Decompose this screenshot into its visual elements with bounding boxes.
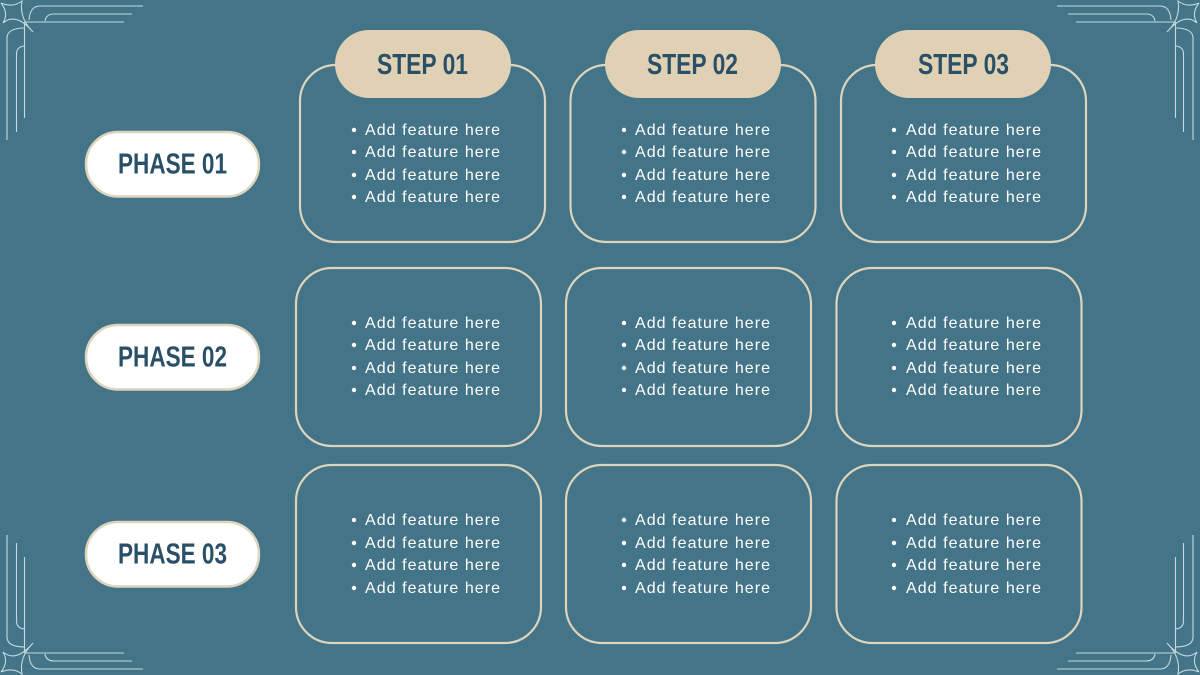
- panel: phase 03 step 02: Add feature here: [635, 557, 770, 574]
- panel: phase 03 step 03: Add feature here: [906, 557, 1041, 574]
- panel: phase 01 step 02: Add feature here: [635, 167, 770, 184]
- panel: phase 03 step 01: Add feature here: [365, 580, 500, 597]
- panel: phase 03 step 02: Add feature here: [635, 512, 770, 529]
- panel: phase 02 step 01: Add feature here: [365, 382, 500, 399]
- panel: phase 03 step 02: [566, 465, 811, 643]
- panel: phase 01 step 01: Add feature here: [365, 167, 500, 184]
- step 01 heading pill: STEP 01: [377, 49, 468, 81]
- step 03 heading pill: STEP 03: [918, 49, 1009, 81]
- panel: phase 01 step 02: Add feature here: [635, 122, 770, 139]
- step 02 heading pill: STEP 02: [647, 49, 738, 81]
- panel: phase 01 step 03: Add feature here: [906, 122, 1041, 139]
- corner ornament: top right: [1057, 1, 1199, 140]
- phase 01 label: [86, 132, 259, 196]
- panel: phase 02 step 03: Add feature here: [906, 360, 1041, 377]
- phase 02 label: [86, 325, 259, 390]
- panel: phase 02 step 02: Add feature here: [635, 337, 770, 354]
- corner ornament: top left: [1, 1, 143, 140]
- panel: phase 02 step 01: [296, 268, 541, 446]
- corner ornament: bottom left: [1, 535, 143, 674]
- panel: phase 01 step 03: Add feature here: [906, 167, 1041, 184]
- panel: phase 01 step 02: [570, 65, 816, 242]
- panel: phase 02 step 03: Add feature here: [906, 315, 1041, 332]
- panel: phase 02 step 02: Add feature here: [635, 315, 770, 332]
- panel: phase 03 step 02: Add feature here: [635, 580, 770, 597]
- step 02 heading pill: [605, 30, 781, 98]
- panel: phase 02 step 01: Add feature here: [365, 315, 500, 332]
- panel: phase 01 step 01: Add feature here: [365, 122, 500, 139]
- corner ornament: bottom right: [1057, 535, 1199, 674]
- panel: phase 02 step 03: [836, 268, 1082, 446]
- step 01 heading pill: [335, 30, 511, 98]
- panel: phase 02 step 03: Add feature here: [906, 382, 1041, 399]
- panel: phase 02 step 02: Add feature here: [635, 382, 770, 399]
- panel: phase 03 step 01: [296, 465, 541, 643]
- panel: phase 02 step 02: [566, 268, 811, 446]
- panel: phase 02 step 01: Add feature here: [365, 360, 500, 377]
- step 03 heading pill: [875, 30, 1051, 98]
- phase 01 label: PHASE 01: [118, 148, 227, 180]
- panel: phase 03 step 03: [836, 465, 1082, 643]
- phase 03 label: [86, 522, 259, 586]
- panel: phase 03 step 01: Add feature here: [365, 535, 500, 552]
- panel: phase 01 step 03: [841, 65, 1086, 242]
- panel: phase 03 step 01: Add feature here: [365, 512, 500, 529]
- panel: phase 01 step 03: Add feature here: [906, 144, 1041, 161]
- panel: phase 03 step 03: Add feature here: [906, 535, 1041, 552]
- panel: phase 01 step 02: Add feature here: [635, 144, 770, 161]
- panel: phase 01 step 03: Add feature here: [906, 189, 1041, 206]
- panel: phase 02 step 03: Add feature here: [906, 337, 1041, 354]
- panel: phase 03 step 01: Add feature here: [365, 557, 500, 574]
- panel: phase 01 step 01: [300, 65, 545, 242]
- phase 03 label: PHASE 03: [118, 538, 227, 570]
- panel: phase 02 step 01: Add feature here: [365, 337, 500, 354]
- panel: phase 02 step 02: Add feature here: [635, 360, 770, 377]
- panel: phase 01 step 01: Add feature here: [365, 144, 500, 161]
- phase 02 label: PHASE 02: [118, 342, 227, 374]
- panel: phase 01 step 01: Add feature here: [365, 189, 500, 206]
- panel: phase 03 step 02: Add feature here: [635, 535, 770, 552]
- panel: phase 01 step 02: Add feature here: [635, 189, 770, 206]
- panel: phase 03 step 03: Add feature here: [906, 580, 1041, 597]
- panel: phase 03 step 03: Add feature here: [906, 512, 1041, 529]
